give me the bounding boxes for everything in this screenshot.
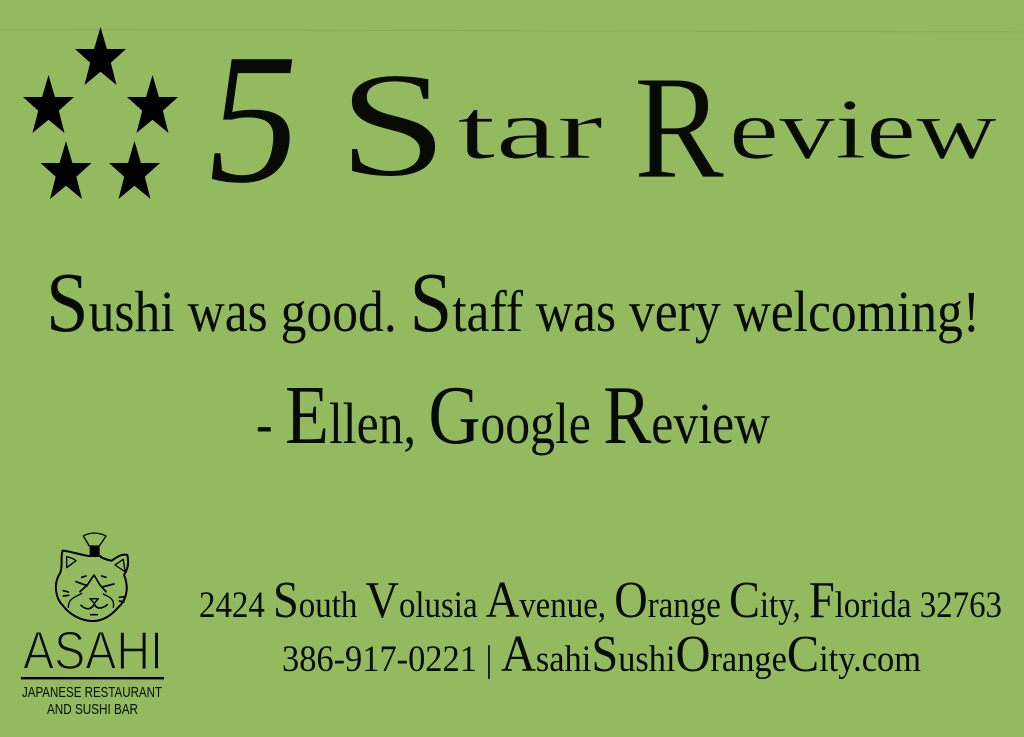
review quote: Sushi was good. Staff was very welcoming! [46, 254, 980, 350]
logo wordmark: ASAHI [23, 621, 163, 681]
title: eview [729, 81, 997, 177]
address: 2424 South Volusia Avenue, Orange City, Florida 32763 [199, 572, 1002, 629]
phone and website: 386-917-0221 | AsahiSushiOrangeCity.com [282, 626, 921, 683]
icon: cat head [56, 533, 128, 621]
logo: Asahi [21, 533, 164, 718]
title: S [338, 42, 448, 208]
logo subtitle second line: AND SUSHI BAR [47, 701, 138, 718]
icon: five stars [23, 27, 178, 199]
logo rule [21, 677, 164, 679]
logo subtitle: JAPANESE RESTAURANT [22, 684, 162, 701]
title: 5 [194, 16, 314, 222]
review attribution: - Ellen, Google Review [256, 369, 770, 462]
title: R [634, 46, 724, 210]
title: tar [457, 81, 603, 177]
title [194, 16, 997, 222]
